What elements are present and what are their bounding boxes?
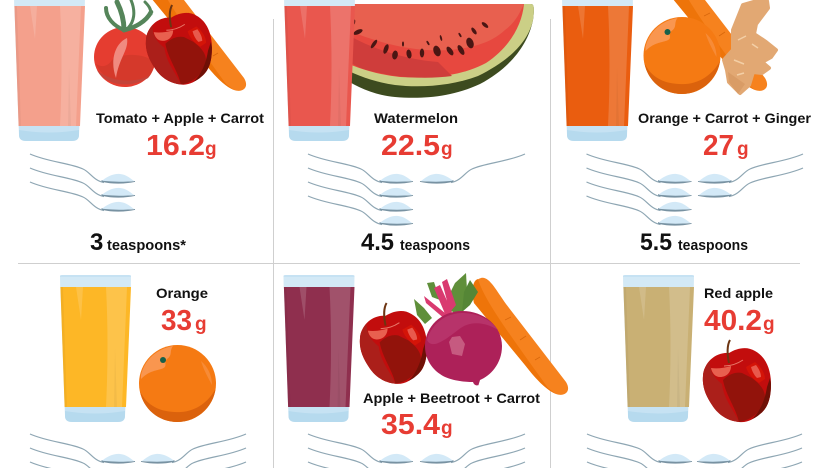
glass: purple juice	[284, 275, 354, 422]
icon: apple	[360, 303, 427, 384]
name: Apple + Beetroot + Carrot	[363, 390, 540, 406]
icon: orange	[644, 17, 720, 94]
sugar grams: g	[737, 139, 749, 160]
teaspoons count: teaspoons	[400, 237, 470, 254]
sugar grams: 35.4	[381, 409, 440, 441]
spoons	[308, 434, 525, 468]
teaspoons count: 4.5	[361, 229, 394, 256]
icon: ginger	[724, 1, 776, 94]
glass: tan juice	[623, 275, 694, 422]
name: Watermelon	[374, 110, 458, 126]
sugar grams: 16.2	[146, 130, 205, 162]
icon: tomato	[94, 0, 156, 87]
name: Orange	[156, 285, 208, 301]
icon: apple	[703, 340, 771, 422]
icon: carrot	[151, 0, 246, 91]
spoons	[30, 434, 246, 468]
panel: tomato apple carrot	[14, 0, 264, 256]
teaspoons count: 5.5	[640, 229, 672, 256]
sugar grams: 40.2	[704, 305, 762, 337]
sugar grams: g	[195, 314, 207, 335]
spoons	[586, 154, 803, 225]
sugar grams: g	[205, 139, 217, 160]
teaspoons count: teaspoons	[678, 237, 748, 254]
sugar grams: g	[763, 314, 775, 335]
glass: pink juice	[14, 0, 85, 141]
name: Orange + Carrot + Ginger	[638, 110, 812, 126]
icon: orange	[139, 345, 216, 422]
sugar grams: 27	[703, 130, 734, 162]
glass: red juice	[284, 0, 355, 141]
teaspoons count	[640, 229, 748, 256]
teaspoons count: teaspoons*	[107, 237, 186, 254]
sugar grams: g	[441, 418, 453, 439]
glass: yellow juice	[60, 275, 131, 422]
name: Red apple	[704, 285, 773, 301]
panel: orange carrot ginger	[562, 0, 812, 256]
panel: apple beetroot carrot	[284, 273, 568, 468]
icon: carrot	[473, 278, 568, 395]
teaspoons count	[361, 229, 470, 256]
teaspoons count: 3	[90, 229, 103, 256]
teaspoons count	[90, 229, 186, 256]
sugar grams: 22.5	[381, 130, 440, 162]
panel: orange	[30, 275, 246, 468]
panel: red apple	[587, 275, 802, 468]
glass: orange juice	[562, 0, 633, 141]
sugar grams: 33	[161, 305, 192, 337]
icon: watermelon	[298, 4, 534, 98]
sugar grams: g	[441, 139, 453, 160]
icon: beetroot	[414, 273, 502, 385]
panel: watermelon	[284, 0, 534, 256]
icon: carrot	[672, 0, 767, 91]
name: Tomato + Apple + Carrot	[96, 110, 264, 126]
icon: apple	[146, 5, 212, 85]
spoons	[587, 434, 802, 468]
spoons	[30, 154, 135, 211]
spoons	[308, 154, 525, 225]
